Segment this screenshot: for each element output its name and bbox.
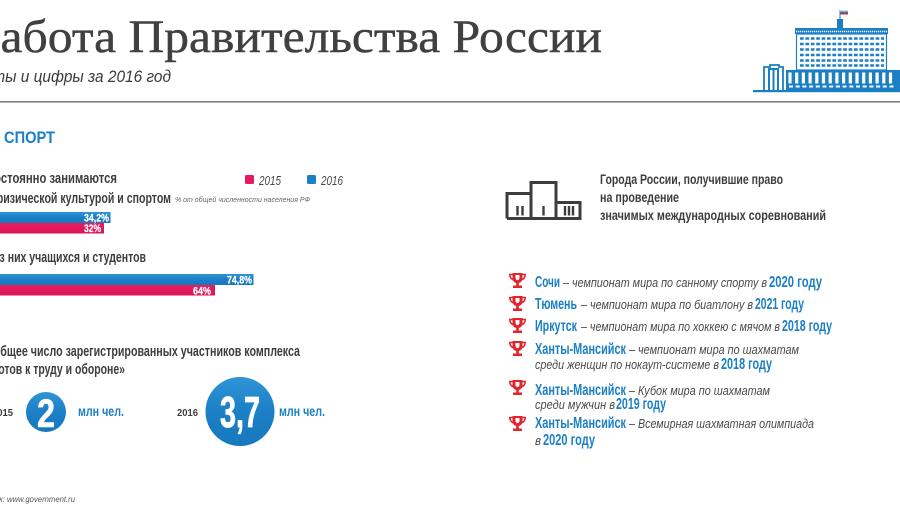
stat: 2016: 2016: [177, 408, 198, 419]
list item: Khanty-Mansiysk men: [510, 380, 770, 413]
heading: cities: значимых международных соревнований: [600, 208, 826, 223]
bar chart: share of population: 32%: [84, 223, 101, 235]
list item: Khanty-Mansiysk women: среди женщин по нокаут-системе в: [535, 358, 719, 372]
list item: Khanty-Mansiysk olympiad: в: [535, 434, 541, 448]
list item: Khanty-Mansiysk men: Ханты-Мансийск: [535, 382, 627, 399]
list item: Khanty-Mansiysk olympiad: – Всемирная шахматная олимпиада: [628, 417, 814, 431]
bar chart: students: [0, 274, 254, 298]
stat: 2015: [0, 392, 124, 436]
heading: regular sport: % от общей численности населения РФ: [175, 195, 310, 204]
legend: 2016: [320, 174, 343, 188]
list item: Tyumen: Тюмень: [535, 296, 577, 313]
stat: 2015: млн чел.: [78, 403, 124, 419]
heading: cities: [600, 172, 826, 223]
list item: Tyumen: – чемпионат мира по биатлону в: [580, 298, 753, 312]
list item: Irkutsk: 2018 году: [782, 318, 832, 335]
section heading: СПОРТ: [4, 128, 56, 147]
stat: 2016: 3,7: [220, 388, 260, 437]
list item: Khanty-Mansiysk women: [510, 341, 799, 373]
legend: 2015: [258, 174, 281, 188]
bar chart: students: 64%: [193, 286, 211, 298]
heading: regular sport: физической культурой и спортом: [0, 190, 171, 207]
stat: 2015: 2: [37, 392, 55, 436]
list item: Khanty-Mansiysk women: Ханты-Мансийск: [535, 341, 627, 358]
heading: regular sport: [0, 170, 310, 207]
bar chart: share of population: [0, 212, 110, 235]
bar chart: students: 74,8%: [227, 274, 252, 286]
heading: GTO participants: [0, 343, 300, 378]
legend: [245, 174, 343, 188]
list item: Khanty-Mansiysk olympiad: Ханты-Мансийск: [535, 415, 627, 432]
list item: Khanty-Mansiysk men: 2019 году: [616, 396, 666, 413]
list item: Irkutsk: Иркутск: [535, 318, 578, 335]
stat: 2016: млн чел.: [279, 403, 325, 419]
list item: Khanty-Mansiysk olympiad: [510, 415, 814, 449]
bar chart: share of population: 34,2%: [84, 212, 109, 224]
list item: Sochi: Сочи: [535, 274, 560, 291]
heading: cities: Города России, получившие право: [600, 172, 783, 187]
list item: Khanty-Mansiysk women: – чемпионат мира по шахматам: [628, 343, 799, 357]
list item: Khanty-Mansiysk olympiad: 2020 году: [543, 432, 595, 449]
list item: Sochi: 2020 году: [769, 274, 822, 291]
list item: Sochi: [510, 273, 822, 291]
icon: government building: [753, 10, 900, 92]
stat: 2016: [177, 377, 325, 446]
list item: Khanty-Mansiysk men: – Кубок мира по шахматам: [628, 384, 770, 398]
list item: Sochi: – чемпионат мира по санному спорту в: [562, 276, 767, 290]
list item: Tyumen: 2021 году: [755, 296, 804, 313]
heading: GTO participants: Общее число зарегистрированных участников комплекса: [0, 343, 300, 360]
list item: Khanty-Mansiysk men: среди мужчин в: [535, 398, 615, 412]
list item: Irkutsk: [510, 318, 832, 335]
list item: Tyumen: [510, 296, 804, 313]
list item: Irkutsk: – чемпионат мира по хоккею с мячом в: [580, 320, 780, 334]
heading: cities: на проведение: [600, 190, 679, 205]
icon: podium: [507, 182, 580, 218]
list item: Khanty-Mansiysk women: 2018 году: [721, 356, 772, 373]
